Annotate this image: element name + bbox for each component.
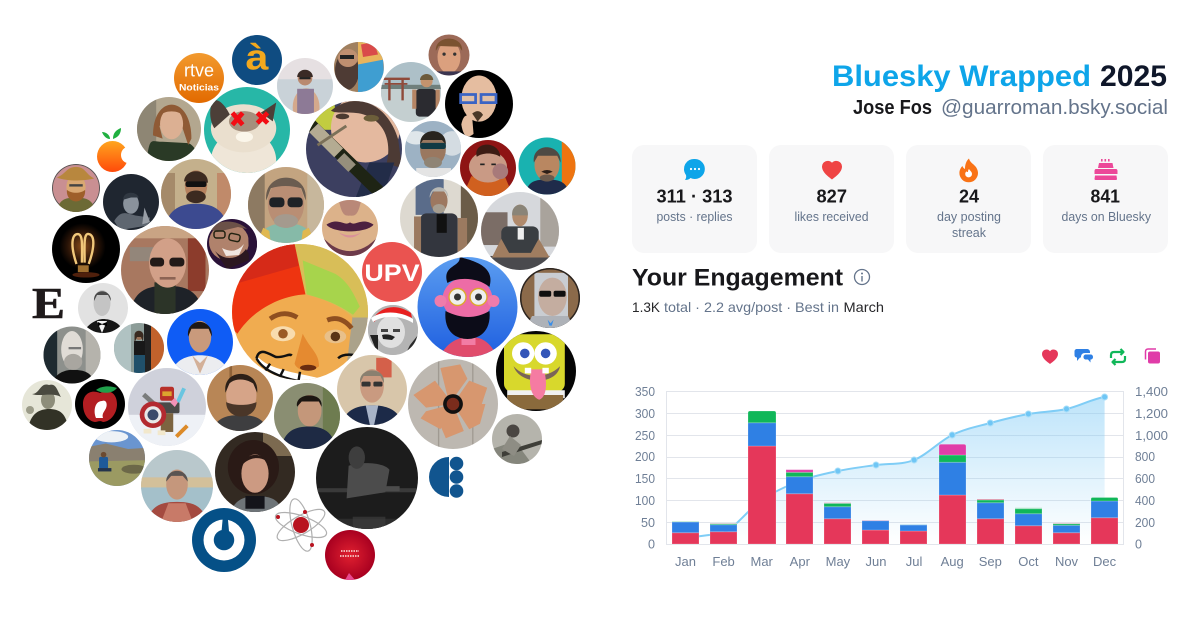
icon: quotes [1146,349,1160,364]
avatar: man with chips bag [334,42,385,92]
icon: info [854,270,870,284]
left axis labels: 250 [635,428,655,443]
cumulative line [686,394,1108,538]
avatar: man in plaid shirt [141,450,213,523]
avatar: cartoon man [428,34,470,80]
title: 2025 [1100,60,1167,93]
avatar: blue ring logo [192,508,256,572]
avatar: dark portrait of a man [103,174,159,230]
right axis labels: 1,200 [1135,406,1168,421]
user name and handle [853,97,1168,119]
avatar: man in a tuxedo [78,283,128,333]
avatar: LEGO Iron Man with shield [128,368,206,446]
avatar: man in suit [337,355,407,425]
heading: Your Engagement: Your Engagement [632,264,843,292]
grid lines [666,391,1124,545]
bar: Aug [939,444,966,544]
avatar: rtve Noticias logo: Noticias [179,82,219,94]
bar: Dec [1091,498,1118,544]
avatar: man in gym mirror selfie [481,192,559,272]
month labels: Feb [712,554,735,569]
icon: reposts [1111,349,1125,365]
avatar: man in mirror selfie [400,179,478,260]
avatar: lightbulb [52,215,120,283]
left axis labels: 200 [635,449,655,464]
engagement summary: total · 2.2 avg/post · Best in [664,299,839,315]
avatar: red neon [325,530,375,580]
engagement summary: 1.3K [632,299,661,315]
avatar: person in corridor [114,323,165,373]
avatar: woman with katana [306,101,402,197]
avatar: old man with hat [22,380,72,430]
icon: replies [1074,349,1093,362]
right axis labels: 1,400 [1135,384,1168,399]
avatar: cartoon man with hat [52,164,100,212]
right axis labels: 600 [1135,471,1155,486]
icon: likes [1042,350,1058,364]
avatar: man in sunglasses, framed [520,268,580,328]
avatar: bearded young man [207,365,273,431]
stat label: likes received [794,209,868,224]
left axis labels: 100 [635,493,655,508]
stat value: 827 [816,186,847,206]
icon: birthday cake [1094,159,1118,180]
panel: day posting streak [906,145,1031,253]
avatar: animated character in red [460,140,516,196]
panel: avatar bubble cluster [22,34,580,580]
avatar: troll-face man with red and green hat [229,244,371,381]
month labels: Jan [675,554,696,569]
month labels: Nov [1055,554,1079,569]
user name and handle: Jose Fos [853,97,932,119]
engagement summary [632,299,884,315]
panel: days on Bluesky [1043,145,1168,253]
icon: orange apple [97,128,135,172]
right axis labels: 1,000 [1135,428,1168,443]
avatar: grumpy cat with red crosses [204,87,290,173]
avatar: man in sunglasses with clouds [405,121,464,179]
engagement summary: March [844,299,884,315]
stat label: streak [952,225,986,240]
bar: May [824,502,851,544]
avatar: mustache close-up [322,200,378,256]
month labels: Mar [751,554,774,569]
left axis labels: 0 [648,536,655,552]
avatar: smiling man on teal and orange [518,138,577,194]
right axis labels: 0 [1135,536,1142,552]
avatar: à logo: à [246,36,270,78]
right axis labels: 800 [1135,449,1155,464]
chart: monthly engagement stacked bars with cumulative line [635,384,1168,569]
left axis labels: 350 [635,384,655,399]
avatar: E logo: E [32,279,65,328]
stat label: day posting [937,209,1001,224]
avatar: woman with dark curly hair [215,432,295,512]
left axis labels [635,384,655,552]
avatar: SpongeBob plush [496,331,576,411]
avatar: bald man with glasses [121,226,209,314]
cumulative area [686,397,1105,544]
left axis labels: 50 [641,515,655,530]
bar: Nov [1053,523,1080,544]
month labels: Sep [979,554,1002,569]
panel: likes received [769,145,894,253]
avatar: man on mountain [89,430,146,486]
icon: flame [959,158,978,182]
avatar: laughing man with glasses [207,219,259,269]
stat value: 24 [959,186,979,206]
avatar: young man in navy jacket [274,383,340,449]
right axis labels: 400 [1135,493,1155,508]
avatar: man in sunglasses and blue shirt [161,159,231,229]
bar: Oct [1015,508,1042,544]
chart legend icons [1042,349,1160,365]
avatar: half-circle blue logo [429,457,463,498]
avatar: man on bright blue [167,309,233,375]
bar: Jul [900,524,927,544]
avatar: rtve Noticias logo [174,53,224,103]
avatar: UPV logo [362,242,422,302]
month labels: Oct [1018,554,1039,569]
avatar: man at the torii gate [381,62,441,125]
avatar: woman at the beach [277,58,333,114]
month labels [675,554,1117,569]
avatar: Groucho with Santa hat [368,305,418,355]
avatar: girl with guitar [492,414,542,464]
bar: Sep [977,499,1004,544]
stat label: days on Bluesky [1062,209,1151,224]
avatar: memoji with blue glasses [445,70,513,138]
bar: Jun [862,520,889,544]
bar: Feb [710,523,737,544]
avatar: black apple logo [75,379,125,429]
bar: Apr [786,470,813,544]
avatar: man in black and white with phone [316,427,418,533]
avatar: bald grey-bearded man [44,326,100,384]
stat value: 841 [1090,186,1120,206]
stat value: 311 · 313 [656,186,732,206]
month labels: Dec [1093,554,1117,569]
avatar: UPV logo: UPV [364,260,420,287]
bar: Mar [748,411,776,544]
avatar: rtve Noticias logo: rtve [184,60,214,80]
icon: heart [822,161,842,180]
stat label: posts · replies [656,209,733,224]
avatar: grey-haired man with dark glasses [248,167,324,243]
icon: atom [273,497,329,553]
right axis labels: 200 [1135,515,1155,530]
bar: Jan [672,521,699,544]
avatar: paper flower on wood [408,359,498,449]
month labels: Aug [941,554,964,569]
left axis labels: 150 [635,471,655,486]
month labels: Jul [906,554,923,569]
avatar: rock musician with long hair [137,97,201,161]
month labels: May [826,554,851,569]
stat label [937,209,1001,240]
panel: posts and replies [632,145,757,253]
left axis labels: 300 [635,406,655,421]
avatar: à logo [232,35,282,85]
month labels: Jun [866,554,886,569]
right axis labels [1135,384,1168,552]
avatar: illustrated man with pink face [418,257,518,357]
title: Bluesky Wrapped [832,60,1091,93]
month labels: Apr [790,554,811,569]
icon: chat bubble [684,159,705,180]
user name and handle: @guarroman.bsky.social [941,97,1168,119]
